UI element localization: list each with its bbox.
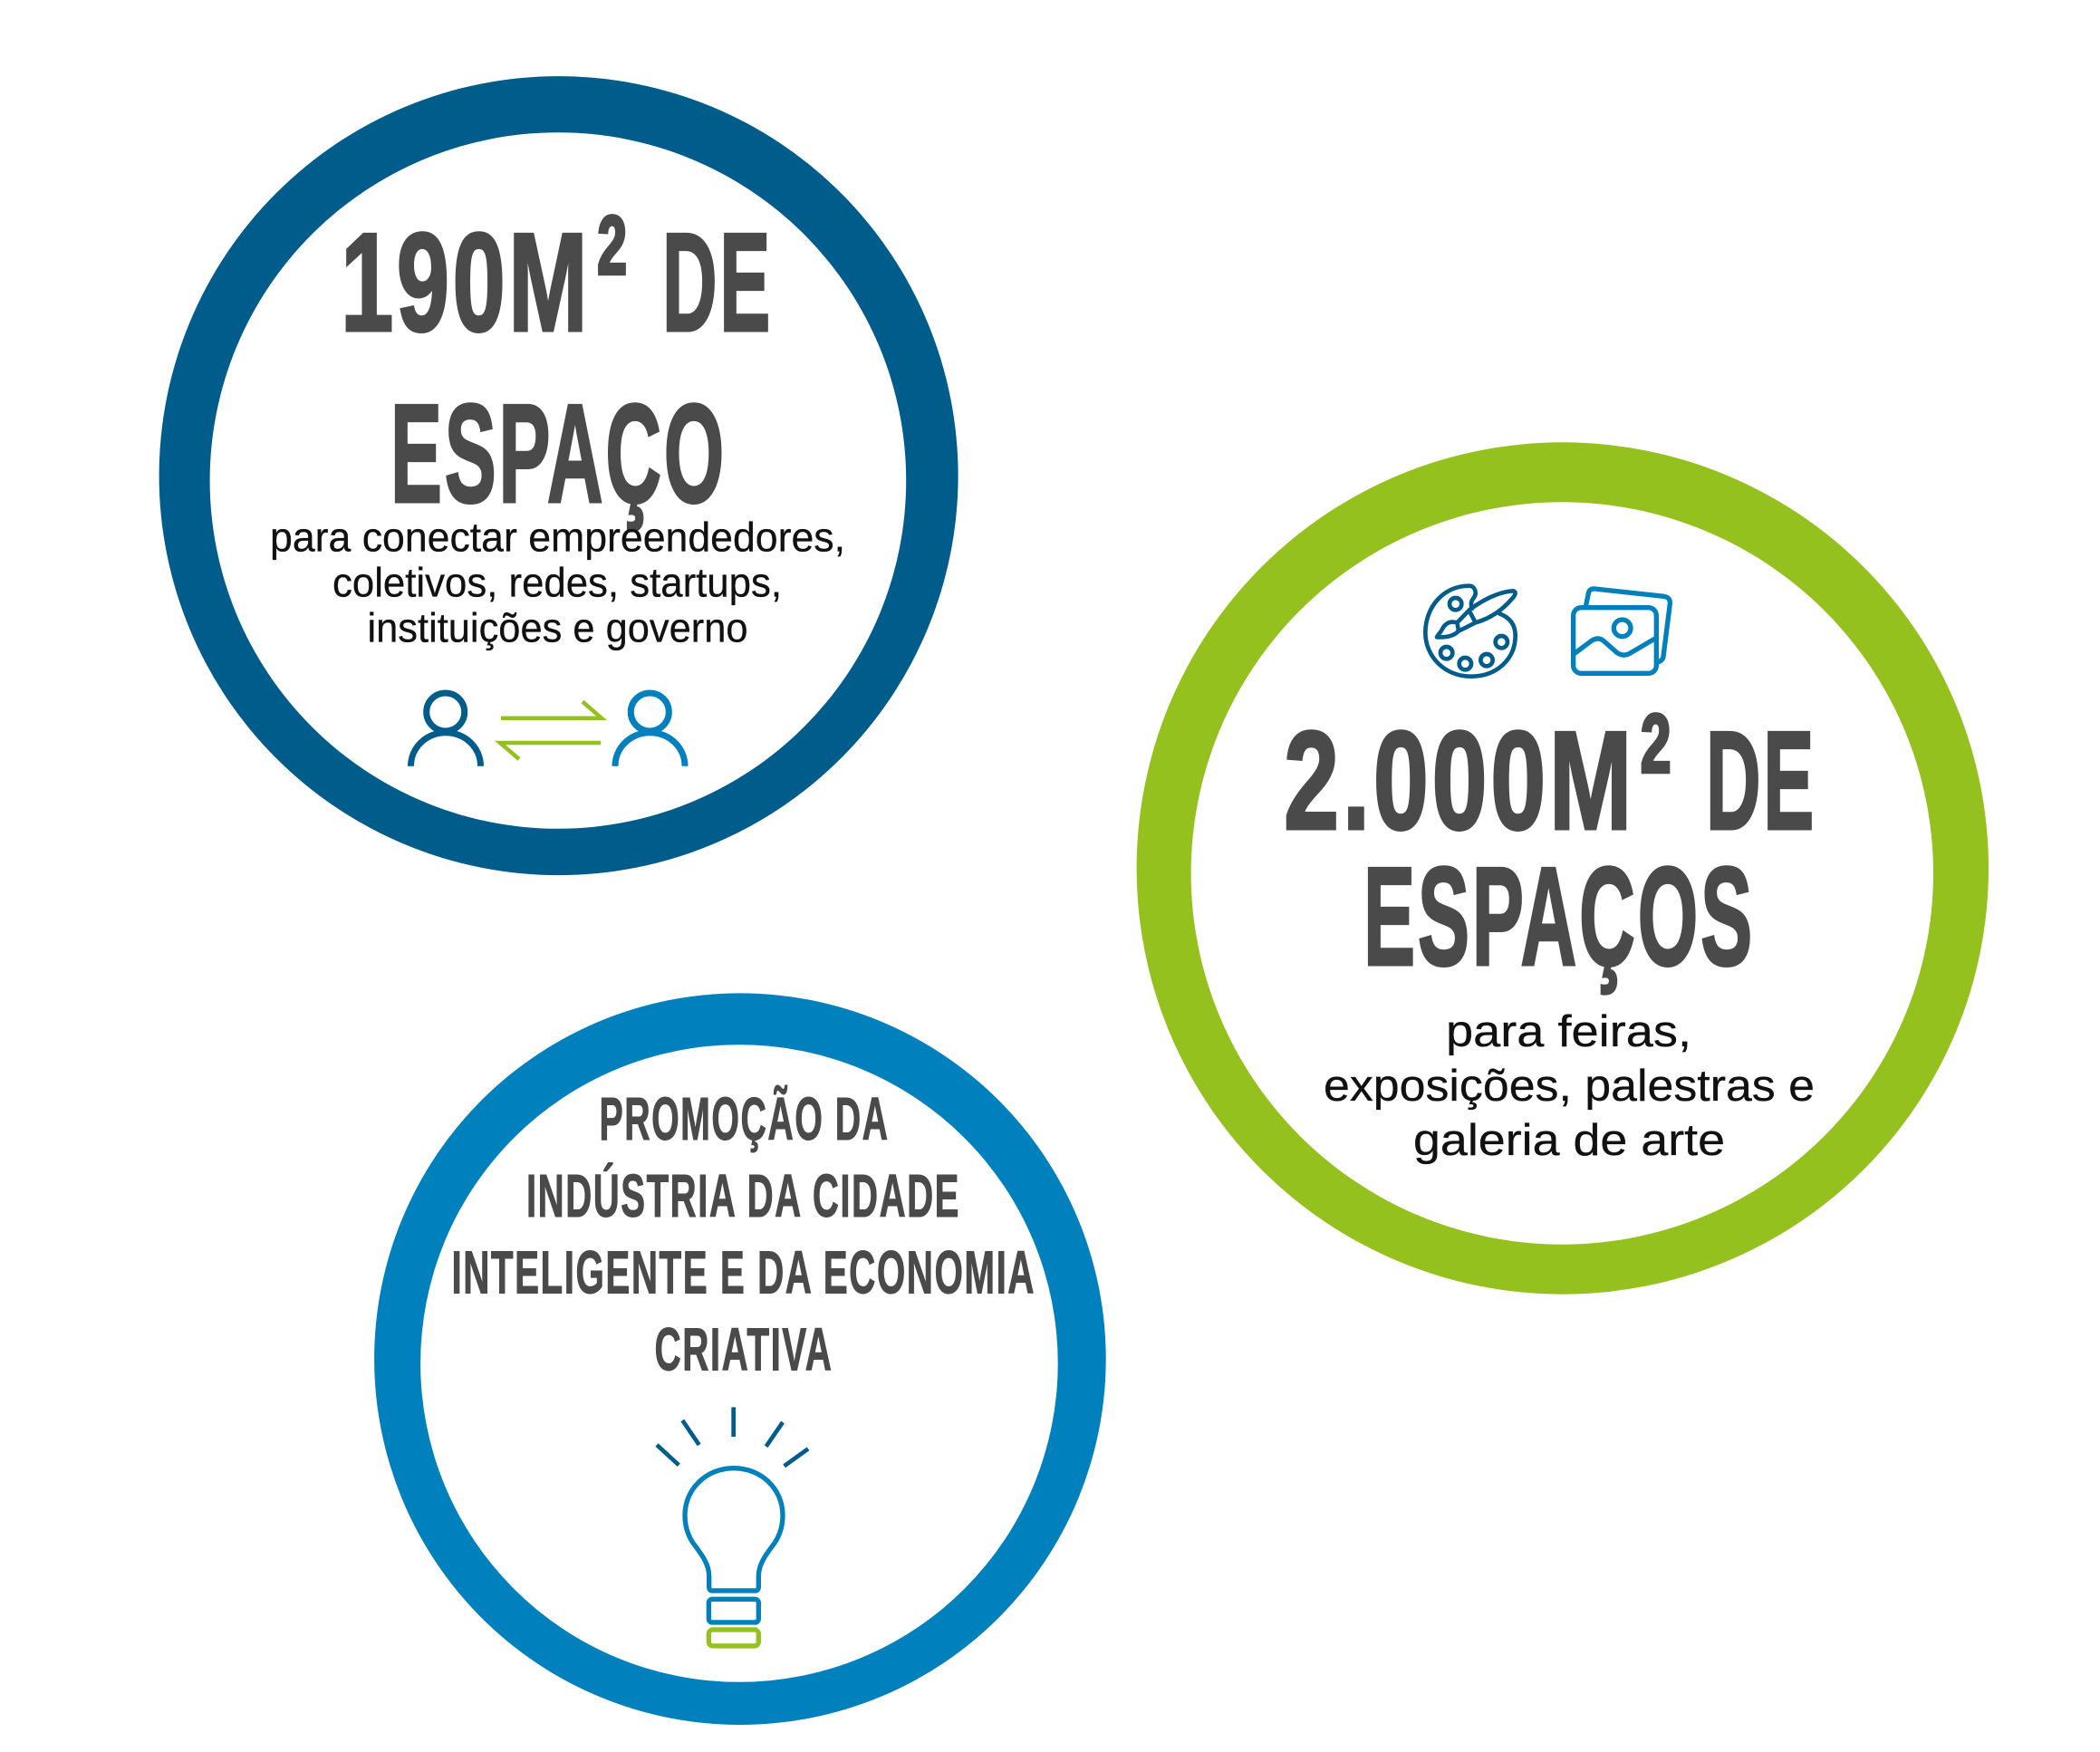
heading: 2000m2 de espacos: ² <box>1640 679 1671 866</box>
text: para conectar: coletivos, redes, startups, <box>332 560 782 605</box>
heading: promocao da industria: INDÚSTRIA DA CIDADE <box>526 1162 960 1230</box>
heading: 2000m2 de espacos: DE <box>1706 702 1816 859</box>
text: para feiras: exposições, palestras e <box>1324 1062 1815 1111</box>
icon: image gallery <box>1574 589 1670 673</box>
heading: 190m2 de espaco: DE <box>662 204 773 361</box>
panel: promocao da industria <box>374 993 1106 1725</box>
icon: bulb glass <box>685 1468 783 1591</box>
heading: promocao da industria: CRIATIVA <box>654 1315 833 1384</box>
text: para feiras <box>1324 1007 1815 1165</box>
text: para feiras: galeria de arte <box>1413 1116 1725 1165</box>
icon: light rays <box>657 1407 808 1466</box>
heading: 190m2 de espaco: ESPAÇO <box>390 375 727 532</box>
heading: 190m2 de espaco <box>341 181 773 532</box>
icon: bulb tip <box>708 1630 758 1646</box>
text: para conectar: para conectar empreendedores, <box>270 515 845 560</box>
icon: bulb base <box>708 1599 758 1622</box>
text: para conectar <box>270 515 845 650</box>
heading: 2000m2 de espacos <box>1284 679 1816 995</box>
icon: person dark <box>411 693 480 766</box>
heading: 190m2 de espaco: ² <box>596 181 627 368</box>
text: para feiras: para feiras, <box>1446 1007 1691 1056</box>
heading: 2000m2 de espacos: 2.000M <box>1284 702 1635 859</box>
heading: promocao da industria: PROMOÇÃO DA <box>600 1085 890 1153</box>
panel: 2000m2 de espacos <box>1137 442 1989 1295</box>
icon: person blue <box>615 693 685 766</box>
icon: exchange arrows <box>500 701 602 759</box>
heading: 190m2 de espaco: 190M <box>341 204 591 361</box>
text: para conectar: instituições e governo <box>368 605 748 650</box>
panel: 190m2 de espaco <box>159 76 958 875</box>
icon: people exchange <box>411 693 685 766</box>
heading: 2000m2 de espacos: ESPAÇOS <box>1363 838 1755 995</box>
ring: dark blue <box>159 76 958 875</box>
icon: light bulb <box>657 1407 808 1646</box>
heading: promocao da industria: INTELIGENTE E DA ECONOMIA <box>451 1239 1036 1306</box>
icon: palette <box>1425 586 1516 677</box>
heading: promocao da industria <box>451 1085 1036 1384</box>
ring: green <box>1137 442 1989 1295</box>
ring: medium blue <box>374 993 1106 1725</box>
